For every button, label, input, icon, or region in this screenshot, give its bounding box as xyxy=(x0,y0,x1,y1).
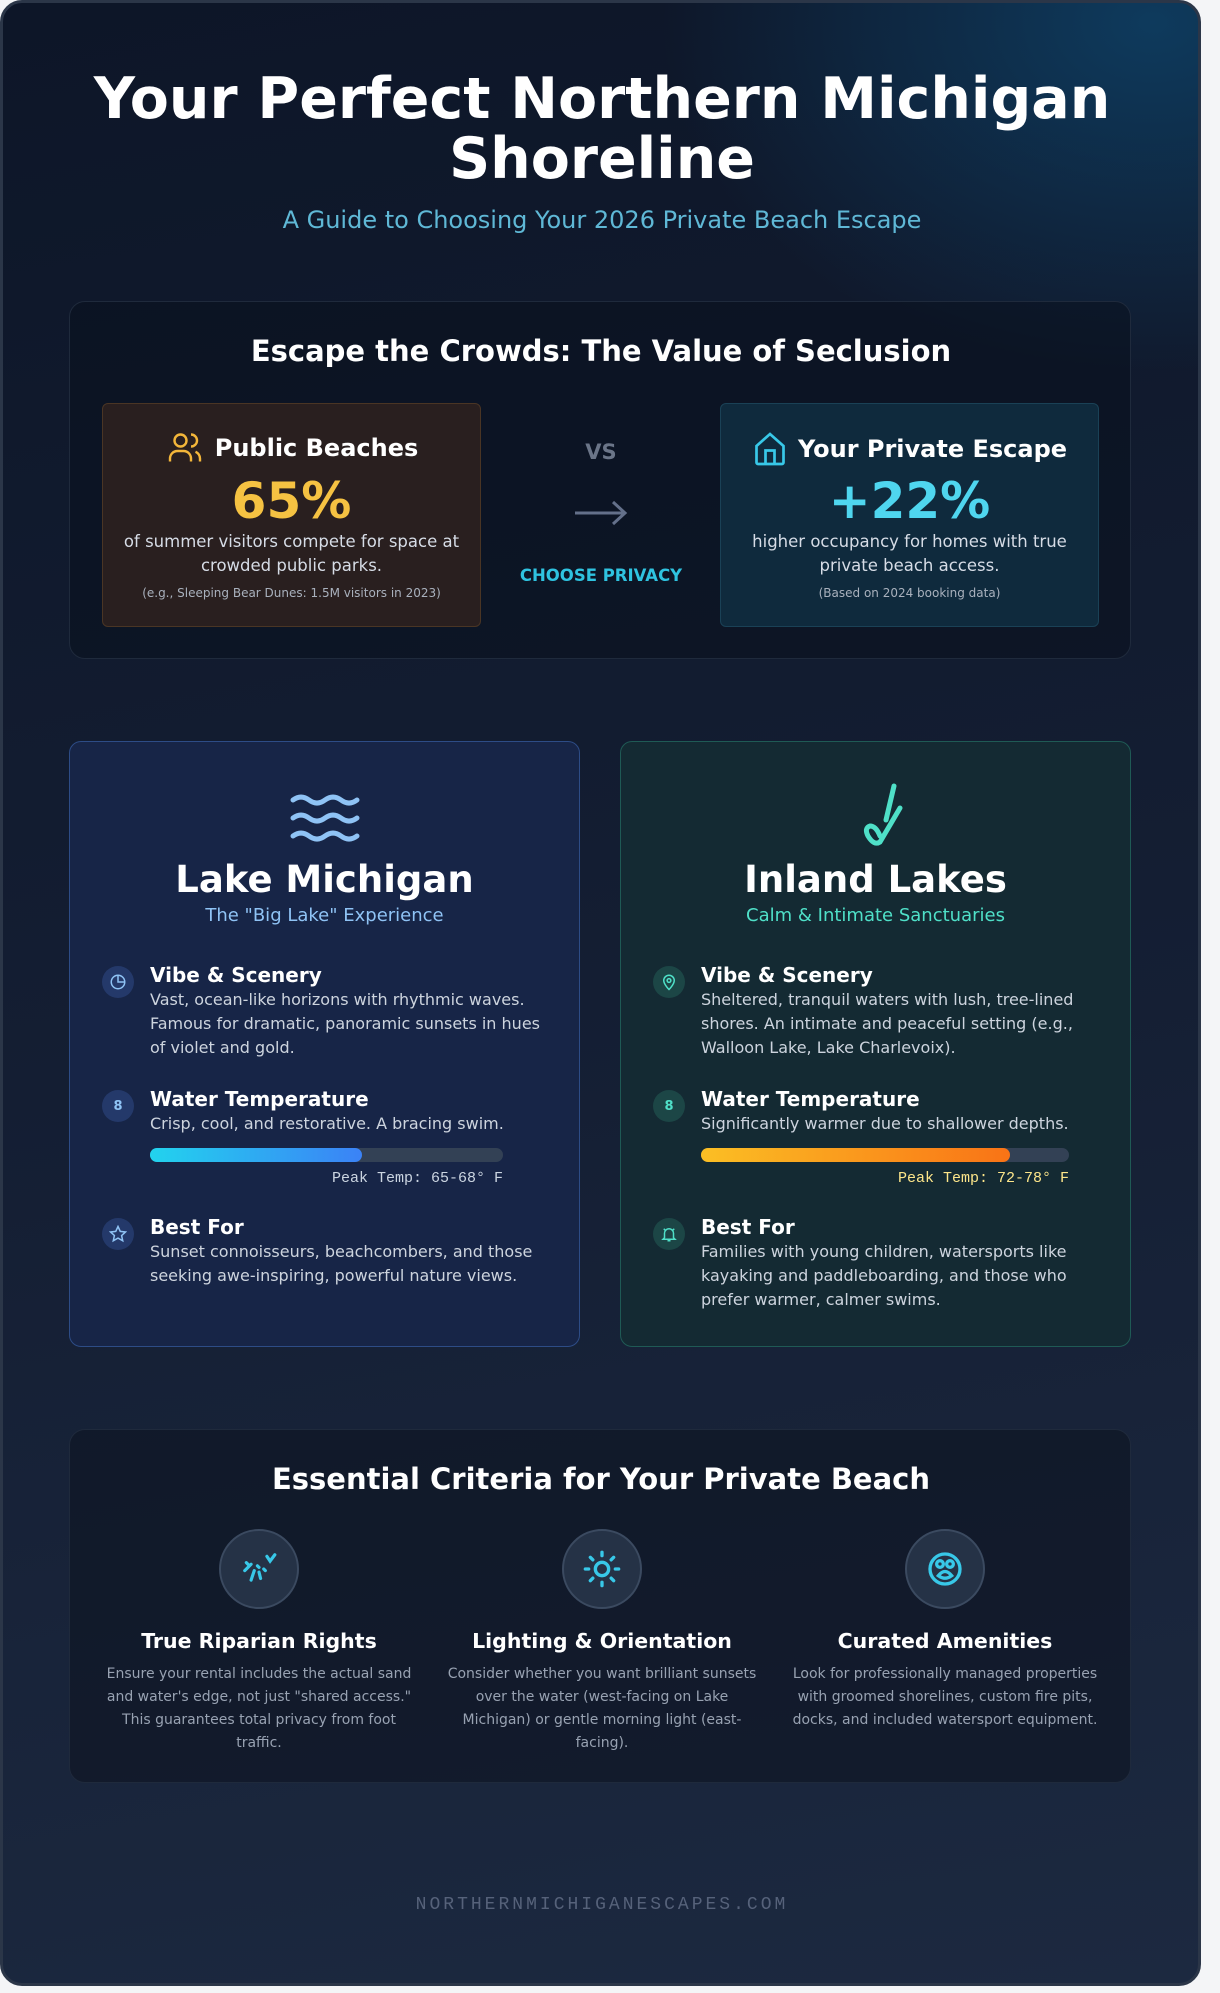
heading: criteria: Essential Criteria for Your Private Beach xyxy=(272,1462,930,1496)
desc: of summer visitors compete for space at crowded public parks. xyxy=(124,532,459,574)
box title with icon: Your Private Escape xyxy=(798,435,1067,463)
item: best for xyxy=(653,1215,1067,1309)
footer: NORTHERNMICHIGANESCAPES.COM xyxy=(416,1895,788,1915)
card: lake michigan xyxy=(69,741,580,1347)
column: riparian rights: True Riparian Rights xyxy=(141,1629,377,1653)
item: vibe: Vast, ocean-like horizons with rhythmic waves. Famous for dramatic, panoramic sunsets in hues of violet and gold. xyxy=(150,990,540,1057)
item: best for: Best For xyxy=(701,1215,795,1239)
column: lighting: Consider whether you want brilliant sunsets over the water (west-facing on Lake Michigan) or gentle morning light (east-facing). xyxy=(448,1666,756,1751)
box: public beaches xyxy=(102,403,481,627)
item: best for: Families with young children, watersports like kayaking and paddleboarding, and those who prefer warmer, calmer swims. xyxy=(701,1242,1067,1309)
title xyxy=(93,66,1110,192)
card: inland lakes xyxy=(620,741,1131,1347)
item: water temp: Peak Temp: 72-78° F xyxy=(898,1170,1069,1187)
item: best for: Sunset connoisseurs, beachcombers, and those seeking awe-inspiring, powerful nature views. xyxy=(150,1242,532,1285)
note: (Based on 2024 booking data) xyxy=(819,586,1000,600)
item: vibe xyxy=(653,963,1073,1057)
column: amenities: Curated Amenities xyxy=(838,1629,1052,1653)
column: riparian rights xyxy=(107,1529,411,1751)
item: water temp: Significantly warmer due to shallower depths. xyxy=(701,1114,1069,1133)
item: vibe: Vibe & Scenery xyxy=(150,963,322,987)
item: water temp: Water Temperature xyxy=(150,1087,369,1111)
item: water temp: Peak Temp: 65-68° F xyxy=(332,1170,503,1187)
item: vibe: Vibe & Scenery xyxy=(701,963,873,987)
box title with icon: Public Beaches xyxy=(215,434,418,462)
item: vibe xyxy=(102,963,540,1057)
temp bar xyxy=(150,1148,503,1162)
vs: VS xyxy=(585,440,617,464)
choose privacy: CHOOSE PRIVACY xyxy=(520,566,682,585)
temp bar xyxy=(701,1148,1069,1162)
title: Your Perfect Northern Michigan xyxy=(94,66,1110,132)
column: amenities: Look for professionally managed properties with groomed shorelines, custom fire pits, docks, and included watersport equipment. xyxy=(793,1666,1097,1728)
box: private escape xyxy=(720,403,1099,627)
stat +22%: +22% xyxy=(829,472,990,530)
heading: seclusion: Escape the Crowds: The Value of Seclusion xyxy=(251,334,951,368)
item: best for xyxy=(102,1215,532,1285)
column: lighting: Lighting & Orientation xyxy=(472,1629,732,1653)
card title: Lake Michigan xyxy=(175,858,474,901)
card subtitle: Calm & Intimate Sanctuaries xyxy=(746,905,1005,926)
item: water temp: 8 xyxy=(113,1098,123,1114)
item: water temp: 8 xyxy=(664,1098,674,1114)
desc: higher occupancy for homes with true private beach access. xyxy=(752,532,1067,574)
column: amenities xyxy=(793,1529,1097,1728)
panel: seclusion xyxy=(69,301,1131,659)
item: water temp: Crisp, cool, and restorative. A bracing swim. xyxy=(150,1114,504,1133)
item: vibe: Sheltered, tranquil waters with lush, tree-lined shores. An intimate and peaceful setting (e.g., Walloon Lake, Lake Charlevoix). xyxy=(701,990,1073,1057)
arrow xyxy=(575,501,627,525)
subtitle: A Guide to Choosing Your 2026 Private Beach Escape xyxy=(283,206,921,234)
icon: check xyxy=(864,784,902,846)
column: riparian rights: Ensure your rental includes the actual sand and water's edge, not just "shared access." This guarantees total privacy from foot traffic. xyxy=(107,1666,411,1751)
card subtitle: The "Big Lake" Experience xyxy=(205,905,444,926)
title: Shoreline xyxy=(449,126,755,192)
item: best for: Best For xyxy=(150,1215,244,1239)
item: water temp xyxy=(102,1087,504,1187)
panel: essential criteria xyxy=(69,1429,1131,1783)
card title: Inland Lakes xyxy=(744,858,1007,901)
stat 65%: 65% xyxy=(232,472,351,530)
item: water temp xyxy=(653,1087,1069,1187)
column: lighting xyxy=(448,1529,756,1751)
icon: waves xyxy=(290,794,360,842)
note: (e.g., Sleeping Bear Dunes: 1.5M visitors in 2023) xyxy=(142,586,441,600)
item: water temp: Water Temperature xyxy=(701,1087,920,1111)
